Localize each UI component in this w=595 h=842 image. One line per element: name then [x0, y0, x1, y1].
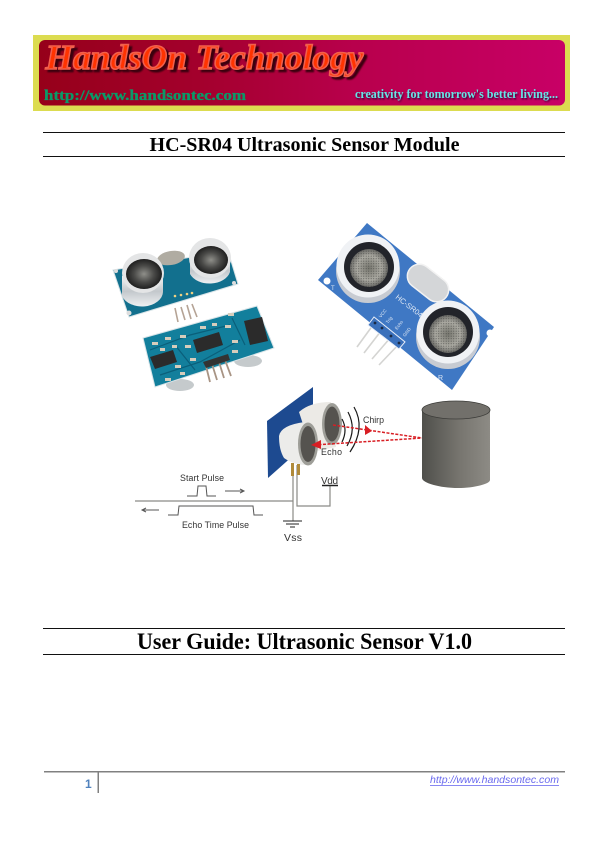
banner tagline: creativity for tomorrow's better living... — [355, 86, 558, 101]
module silk labels: T — [331, 286, 335, 292]
module silk labels — [331, 286, 443, 382]
module silk labels: HC-SR04 — [394, 292, 425, 319]
diagram labels: Echo Time Pulse — [182, 520, 249, 530]
photo: HC-SR04 module back — [143, 306, 274, 391]
diagram labels: Vss — [284, 532, 302, 544]
banner: HandsOn Technology — [33, 35, 570, 111]
banner url: http://www.handsontec.com — [44, 88, 246, 104]
subtitle text: User Guide: Ultrasonic Sensor V1.0 — [137, 629, 472, 654]
page number: 1 — [85, 777, 92, 791]
photo: HC-SR04 module front — [113, 238, 238, 322]
banner logo text: HandsOn Technology — [44, 38, 364, 77]
diagram labels: Echo — [321, 447, 342, 457]
banner tagline: creativity for tomorrow's better living... — [356, 88, 559, 102]
diagram labels: Start Pulse — [180, 473, 224, 483]
footer — [44, 771, 565, 793]
pulse signals — [142, 486, 338, 527]
sensor board — [267, 387, 313, 478]
diagram: ultrasonic operation — [135, 387, 490, 544]
ray arrowheads — [311, 425, 372, 449]
diagram labels — [180, 415, 384, 544]
banner logo text: HandsOn Technology — [47, 40, 367, 80]
module silk labels: R — [438, 375, 443, 382]
diagram labels: Vdd — [321, 476, 338, 487]
module silk labels: VCC — [378, 307, 388, 319]
module silk labels: Trig — [385, 315, 394, 325]
title text: HC-SR04 Ultrasonic Sensor Module — [150, 134, 460, 156]
diagram labels: Chirp — [363, 415, 384, 425]
pins and wires — [135, 463, 330, 521]
footer link: http://www.handsontec.com — [430, 775, 559, 786]
sensor cans — [279, 402, 342, 466]
module silk labels: GND — [402, 326, 412, 338]
module silk labels: Echo — [394, 319, 404, 331]
photo: blue ultrasonic module — [318, 223, 494, 390]
cylinder target — [422, 401, 490, 488]
sound waves and rays — [314, 407, 422, 452]
